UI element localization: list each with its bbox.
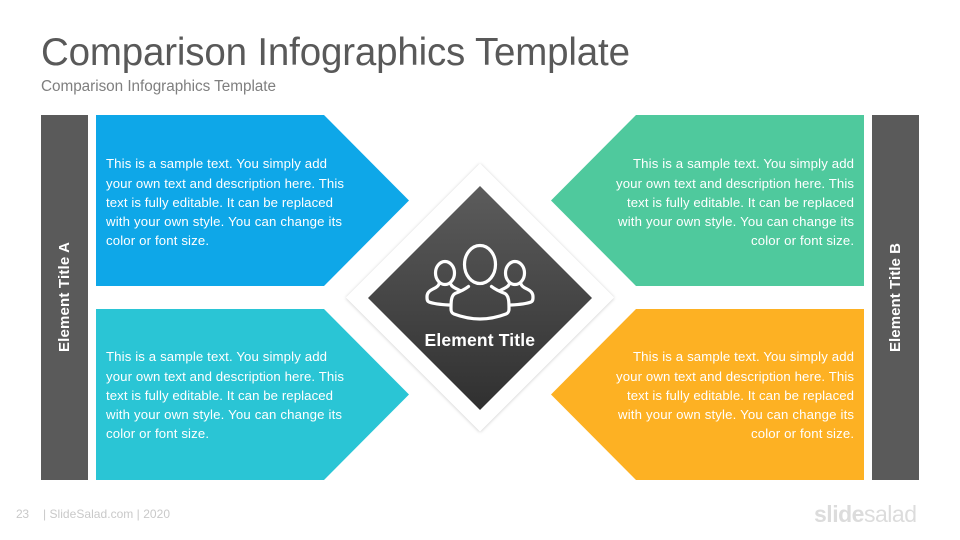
title: Comparison Infographics Template — [41, 31, 630, 74]
side bar: Element Title B: Element Title B — [887, 243, 904, 352]
side bar: Element Title B — [872, 115, 919, 480]
panel: bottom right orange arrow: This is a sample text. You simply add — [633, 349, 854, 364]
panel: bottom right orange arrow: with your own style. You can change its — [617, 407, 854, 422]
panel: bottom left teal arrow: your own text and description here. This — [106, 369, 344, 384]
panel: bottom left teal arrow: text is fully editable. It can be replaced — [106, 388, 333, 403]
inner dark diamond — [368, 186, 592, 410]
panel: bottom right orange arrow — [551, 309, 864, 480]
panel: top right green arrow: color or font size. — [751, 233, 854, 248]
subtitle: Comparison Infographics Template — [41, 78, 276, 95]
panel: bottom right orange arrow: text is fully editable. It can be replaced — [627, 388, 854, 403]
panel: bottom left teal arrow: color or font size. — [106, 426, 209, 441]
panel: top left blue arrow: your own text and description here. This — [106, 176, 344, 191]
panel: bottom right orange arrow: your own text and description here. This — [616, 369, 854, 384]
page number: 23 — [16, 507, 29, 521]
panel: top left blue arrow: color or font size. — [106, 233, 209, 248]
panel: bottom left teal arrow: with your own style. You can change its — [105, 407, 342, 422]
outer white diamond — [346, 164, 614, 432]
icon: group of people — [427, 246, 533, 319]
panel: top right green arrow: with your own style. You can change its — [617, 214, 854, 229]
panel: top right green arrow: text is fully editable. It can be replaced — [627, 195, 854, 210]
panel: top left blue arrow — [96, 115, 409, 286]
side bar: Element Title A — [41, 115, 88, 480]
panel: bottom right orange arrow: color or font size. — [751, 426, 854, 441]
panel: top left blue arrow: This is a sample text. You simply add — [106, 156, 327, 171]
panel: top left blue arrow: with your own style. You can change its — [105, 214, 342, 229]
side bar: Element Title A: Element Title A — [56, 242, 73, 352]
center diamond — [346, 164, 614, 432]
panel: top right green arrow: your own text and description here. This — [616, 176, 854, 191]
footer text: | SlideSalad.com | 2020 — [43, 507, 170, 521]
panel: bottom left teal arrow: This is a sample text. You simply add — [106, 349, 327, 364]
panel: top right green arrow: This is a sample text. You simply add — [633, 156, 854, 171]
center label: Element Title — [424, 330, 535, 350]
panel: top left blue arrow: text is fully editable. It can be replaced — [106, 195, 333, 210]
panel: top right green arrow — [551, 115, 864, 286]
panel: bottom left teal arrow — [96, 309, 409, 480]
logo: slidesalad: slidesalad — [814, 501, 917, 527]
